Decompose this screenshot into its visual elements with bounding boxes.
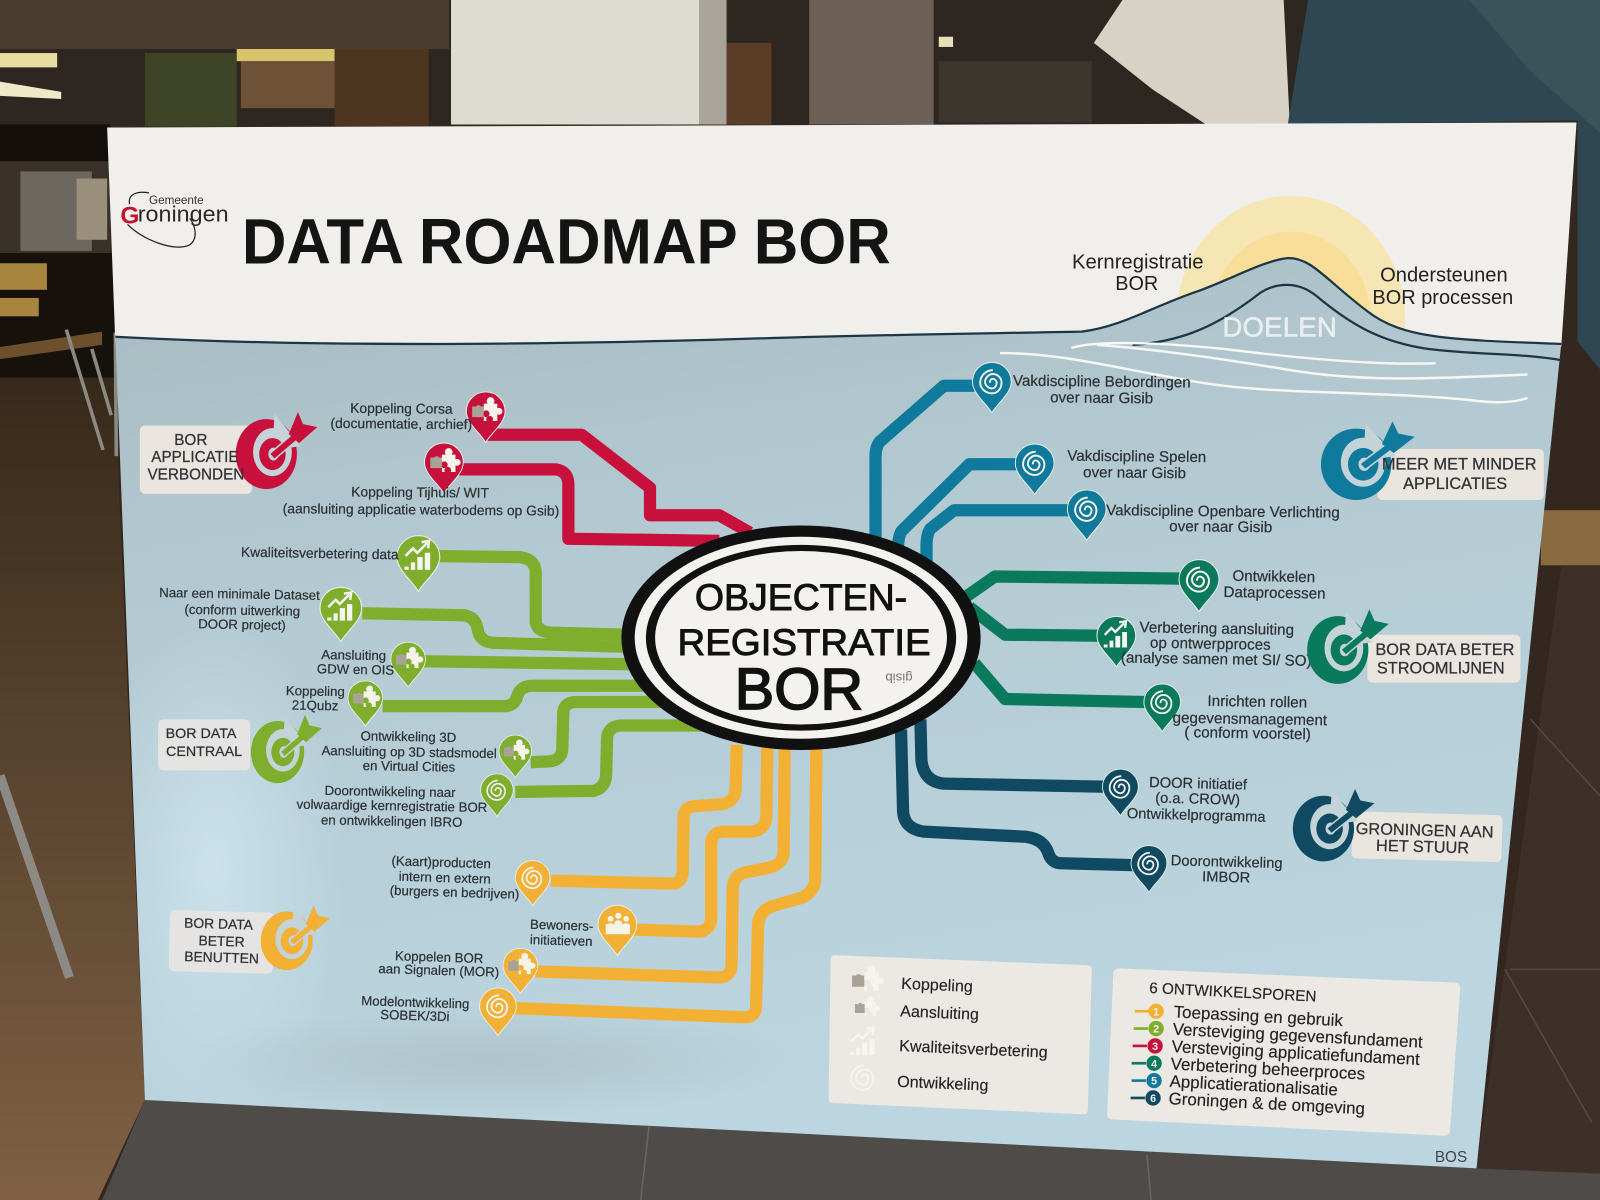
goal: BOR data beter stroomlijnen	[1307, 609, 1520, 684]
labels: green track milestones: en ontwikkelingen IBRO	[321, 812, 462, 830]
labels: dark blue track milestones: (o.a. CROW)	[1155, 791, 1240, 809]
labels: green track milestones: Doorontwikkeling naar	[324, 783, 456, 800]
labels: teal track milestones: Ontwikkelen	[1232, 568, 1315, 586]
labels: blue track milestones: Vakdiscipline Bebordingen	[1013, 373, 1191, 391]
goal: BOR data beter benutten: BENUTTEN	[184, 948, 259, 966]
labels: dark blue track milestones: IMBOR	[1202, 869, 1250, 887]
legend keys: track colours and numbers: 5	[1151, 1076, 1157, 1088]
illustration: rising sun behind the mountain	[1177, 196, 1405, 441]
goal: BOR data centraal: CENTRAAL	[166, 744, 242, 760]
goal label: Kernregistratie BOR: Kernregistratie	[1072, 251, 1204, 273]
legend labels: track names	[1168, 1002, 1423, 1118]
legend labels: track names: Verbetering beheerproces	[1170, 1054, 1366, 1084]
goal: BOR applicatie verbonden: VERBONDEN	[147, 467, 244, 484]
goal: BOR data centraal	[158, 715, 322, 783]
labels: green track milestones: Kwaliteitsverbetering data	[241, 545, 399, 562]
central hub: Objectenregistratie BOR: gisib	[885, 670, 913, 685]
legend: 6 ontwikkelsporen	[1112, 973, 1455, 1131]
labels: orange track milestones: Bewoners-	[530, 917, 594, 934]
legend keys: track colours and numbers: 1	[1153, 1006, 1159, 1018]
labels: blue track milestones: over naar Gisib	[1050, 389, 1153, 407]
goal: Meer met minder applicaties: APPLICATIES	[1403, 475, 1507, 493]
labels: dark blue track milestones: DOOR initiatief	[1149, 775, 1248, 794]
legend icon: kwaliteitsverbetering	[850, 1028, 874, 1055]
goal: BOR data beter benutten: BETER	[198, 932, 245, 950]
labels: orange track milestones: initiatieven	[530, 932, 593, 949]
labels: blue track milestones: Vakdiscipline Openbare Verlichting	[1106, 502, 1340, 522]
legend: icon types	[833, 959, 1088, 1110]
labels: dark blue track milestones: Ontwikkelprogramma	[1127, 806, 1267, 826]
labels: green track milestones: volwaardige kernregistratie BOR	[296, 797, 487, 815]
labels: orange track milestones: Modelontwikkeling	[361, 993, 470, 1012]
labels: teal track milestones: Dataprocessen	[1223, 584, 1326, 603]
central hub: Objectenregistratie BOR: BOR	[735, 657, 863, 722]
central hub: Objectenregistratie BOR	[621, 526, 981, 750]
legend labels: track names: Versteviging gegevensfundament	[1172, 1020, 1423, 1052]
goal: BOR data beter benutten	[169, 906, 330, 974]
goal label: Ondersteunen BOR processen: BOR processen	[1372, 287, 1513, 309]
labels: green track milestones: GDW en OIS	[317, 661, 394, 678]
goal label: Kernregistratie BOR	[1072, 251, 1204, 295]
title: DATA ROADMAP BOR	[242, 205, 891, 277]
labels: blue track milestones	[1011, 373, 1341, 537]
labels: green track milestones: (conform uitwerking	[184, 602, 300, 619]
labels: red track milestones: (documentatie, archief)	[330, 415, 472, 432]
goal label: Kernregistratie BOR: BOR	[1115, 273, 1158, 295]
labels: green track milestones: en Virtual Cities	[363, 758, 456, 775]
legend keys: track colours and numbers	[1131, 1004, 1164, 1106]
labels: blue track milestones: Vakdiscipline Spelen	[1067, 448, 1206, 466]
labels: orange track milestones	[361, 852, 595, 1029]
legend labels: icon types: Ontwikkeling	[897, 1073, 989, 1095]
labels: teal track milestones	[1119, 566, 1331, 744]
labels: green track milestones: Koppeling	[286, 683, 345, 699]
labels: dark blue track milestones: Doorontwikkeling	[1170, 853, 1283, 872]
legend labels: track names: Applicatierationalisatie	[1169, 1072, 1338, 1100]
goal: BOR applicatie verbonden: BOR	[174, 432, 207, 449]
labels: orange track milestones: (burgers en bedrijven)	[390, 883, 520, 902]
central hub: Objectenregistratie BOR: REGISTRATIE	[678, 622, 931, 663]
legend keys: track colours and numbers: 4	[1151, 1058, 1157, 1070]
goal label: Ondersteunen BOR processen	[1372, 265, 1513, 309]
legend labels: track names: Toepassing en gebruik	[1173, 1002, 1344, 1030]
labels: teal track milestones: op ontwerpproces	[1150, 635, 1271, 654]
legend labels: icon types	[897, 975, 1048, 1095]
labels: teal track milestones: (analyse samen met SI/ SO)	[1121, 649, 1312, 670]
labels: teal track milestones: Inrichten rollen	[1207, 693, 1307, 712]
logo: Gemeente Groningen	[120, 192, 229, 247]
panel: roadmap board white header	[107, 122, 1577, 347]
labels: orange track milestones: intern en extern	[399, 869, 491, 887]
panel: water and mountain area of the board	[82, 258, 1561, 1168]
labels: red track milestones: Koppeling Tijhuis/ WIT	[351, 483, 490, 501]
mountain label: DOELEN: DOELEN	[1222, 312, 1337, 343]
labels: blue track milestones: over naar Gisib	[1083, 464, 1186, 482]
credit mark: BOS: BOS	[1435, 1149, 1467, 1166]
logo: Gemeente Groningen: roningen	[138, 201, 229, 226]
legend labels: track names: Versteviging applicatiefundament	[1171, 1037, 1421, 1069]
legend keys: track colours and numbers: 3	[1152, 1041, 1158, 1053]
legend icon: koppeling	[852, 966, 884, 991]
labels: dark blue track milestones	[1125, 774, 1285, 887]
goal: BOR data beter stroomlijnen: BOR DATA BETER	[1375, 641, 1515, 659]
pins: red tracks	[424, 392, 505, 493]
labels: orange track milestones: SOBEK/3Di	[380, 1007, 450, 1024]
illustration: white wave lines	[1000, 343, 1528, 402]
labels: green track milestones: DOOR project)	[198, 616, 286, 633]
pins: orange tracks	[480, 861, 637, 1036]
goal: BOR data centraal: BOR DATA	[166, 726, 237, 742]
labels: green track milestones: Naar een minimale Dataset	[159, 585, 320, 603]
labels: orange track milestones: aan Signalen (MOR)	[378, 961, 499, 980]
labels: teal track milestones: Verbetering aansluiting	[1139, 619, 1294, 639]
labels: teal track milestones: ( conform voorstel)	[1184, 724, 1311, 743]
legend labels: icon types: Aansluiting	[900, 1002, 979, 1024]
pins: teal tracks	[1097, 560, 1219, 732]
legend keys: track colours and numbers: 6	[1150, 1093, 1156, 1105]
labels: green track milestones: Ontwikkeling 3D	[360, 728, 456, 745]
goal: Groningen aan het stuur: GRONINGEN AAN	[1356, 820, 1494, 842]
legend heading: 6 ONTWIKKELSPOREN	[1149, 980, 1317, 1006]
tracks: red applicatiefundament	[449, 435, 750, 541]
goal: Meer met minder applicaties	[1321, 421, 1544, 500]
labels: blue track milestones: over naar Gisib	[1169, 518, 1272, 536]
goal: BOR applicatie verbonden: APPLICATIE	[151, 449, 239, 466]
labels: teal track milestones: gegevensmanagement	[1172, 710, 1328, 729]
legend keys: track colours and numbers: 2	[1153, 1024, 1159, 1036]
legend labels: icon types: Koppeling	[901, 975, 973, 996]
goal: BOR applicatie verbonden	[140, 412, 317, 494]
labels: green track milestones: 21Qubz	[292, 698, 338, 713]
labels: green track milestones: Aansluiting op 3D stadsmodel	[321, 743, 497, 761]
tracks: green gegevensfundament	[362, 556, 704, 792]
tracks: blue applicatierationalisatie	[876, 386, 1071, 566]
labels: green track milestones: Aansluiting	[321, 647, 386, 663]
labels: orange track milestones: Koppelen BOR	[395, 948, 484, 966]
goal: BOR data beter stroomlijnen: STROOMLIJNEN	[1377, 659, 1505, 677]
labels: orange track milestones: (Kaart)producten	[391, 853, 491, 871]
labels: green track milestones	[155, 543, 500, 830]
labels: red track milestones: Koppeling Corsa	[350, 400, 453, 417]
pins: blue tracks	[972, 362, 1106, 540]
labels: red track milestones	[283, 399, 560, 519]
tracks: teal beheerproces	[961, 577, 1184, 702]
pins: green tracks	[320, 536, 532, 816]
tracks: orange toepassing en gebruik	[515, 745, 816, 1017]
goal: Groningen aan het stuur	[1293, 789, 1503, 862]
tracks: dark blue Groningen en omgeving	[901, 719, 1138, 865]
legend icon: ontwikkeling	[851, 1065, 873, 1090]
logo: Gemeente Groningen: G	[120, 202, 139, 229]
goal: Meer met minder applicaties: MEER MET MINDER	[1382, 455, 1537, 473]
legend labels: icon types: Kwaliteitsverbetering	[899, 1037, 1048, 1062]
goal label: Ondersteunen BOR processen: Ondersteunen	[1380, 265, 1508, 287]
central hub: Objectenregistratie BOR: OBJECTEN-	[695, 577, 907, 618]
pins: dark blue tracks	[1102, 769, 1167, 892]
logo: Gemeente Groningen: Gemeente	[149, 194, 204, 207]
goal: Groningen aan het stuur: HET STUUR	[1376, 837, 1470, 857]
goal: BOR data beter benutten: BOR DATA	[184, 914, 254, 933]
legend icon: aansluiting	[855, 996, 880, 1016]
labels: red track milestones: (aansluiting applicatie waterbodems op Gsib)	[283, 500, 559, 519]
legend labels: track names: Groningen & de omgeving	[1168, 1089, 1366, 1118]
